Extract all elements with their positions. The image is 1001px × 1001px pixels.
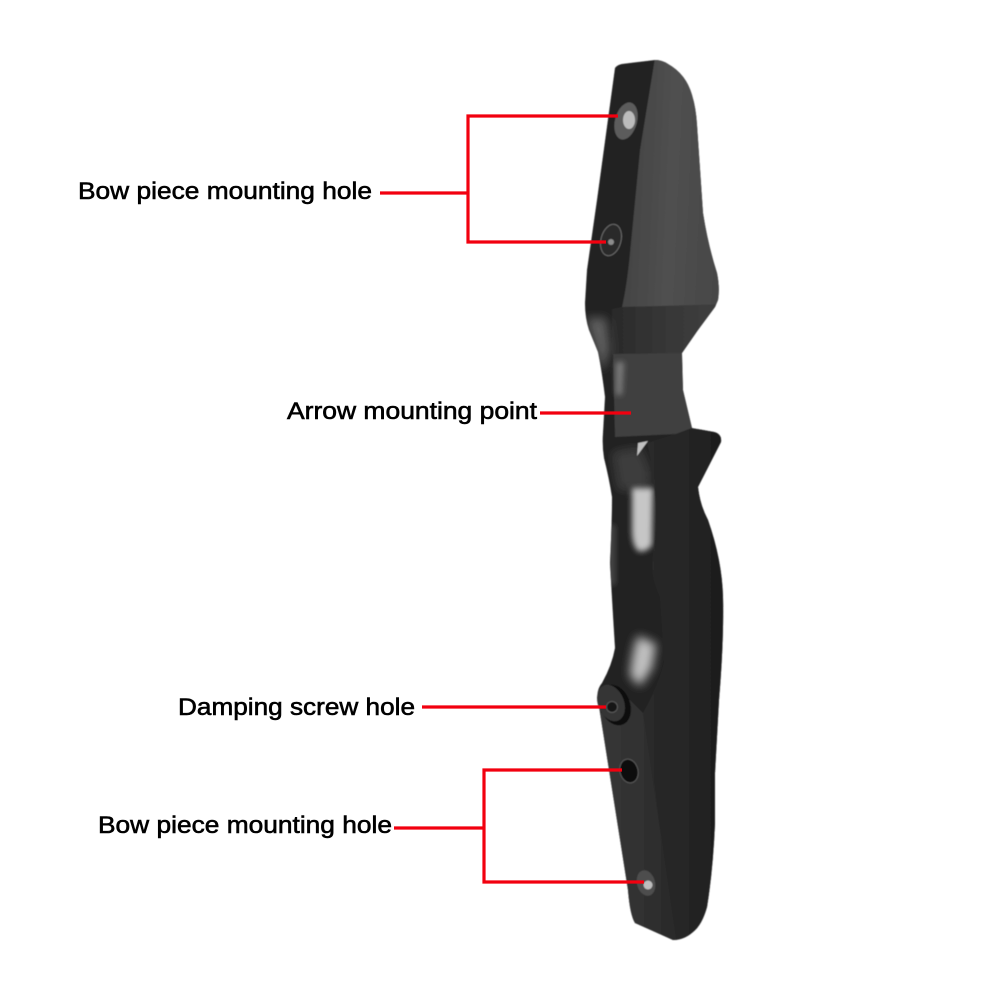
label: arrow mounting point: Arrow mounting point [287, 398, 537, 425]
hole: lower mount top [617, 757, 641, 785]
connector: arrow point [540, 411, 631, 415]
hole: lower mount bottom [634, 868, 658, 898]
shoulder under the rest [612, 447, 650, 490]
connector: damping hole [422, 705, 606, 709]
connector: upper bracket [380, 116, 618, 242]
arrow rest face [613, 353, 692, 437]
label: damping screw hole: Damping screw hole [178, 694, 415, 721]
grip highlight upper [632, 488, 653, 551]
arrow rest highlight [616, 362, 624, 395]
hole: damping screw [606, 702, 618, 712]
notch highlight [637, 441, 648, 456]
upper limb pocket side face [622, 60, 720, 308]
hole: upper mount top [610, 100, 642, 142]
label: bow piece mounting hole (lower): Bow piece mounting hole [98, 812, 392, 839]
damping boss [592, 681, 630, 725]
grip highlight lower [630, 636, 656, 686]
riser silhouette [580, 55, 730, 945]
damping boss rim [593, 680, 637, 730]
shelf under the limb pocket [612, 305, 716, 354]
hole: upper mount bottom [597, 222, 625, 258]
neck left highlight [586, 318, 610, 372]
lower limb pocket plate [600, 700, 672, 940]
connector: lower bracket [394, 770, 644, 882]
diagram: bow riser with labelled mounting points [80, 59, 724, 941]
grip left rim highlight [609, 525, 615, 585]
bow riser photo [580, 55, 730, 945]
grip back face [654, 428, 724, 940]
label: bow piece mounting hole (upper): Bow piece mounting hole [78, 178, 372, 205]
